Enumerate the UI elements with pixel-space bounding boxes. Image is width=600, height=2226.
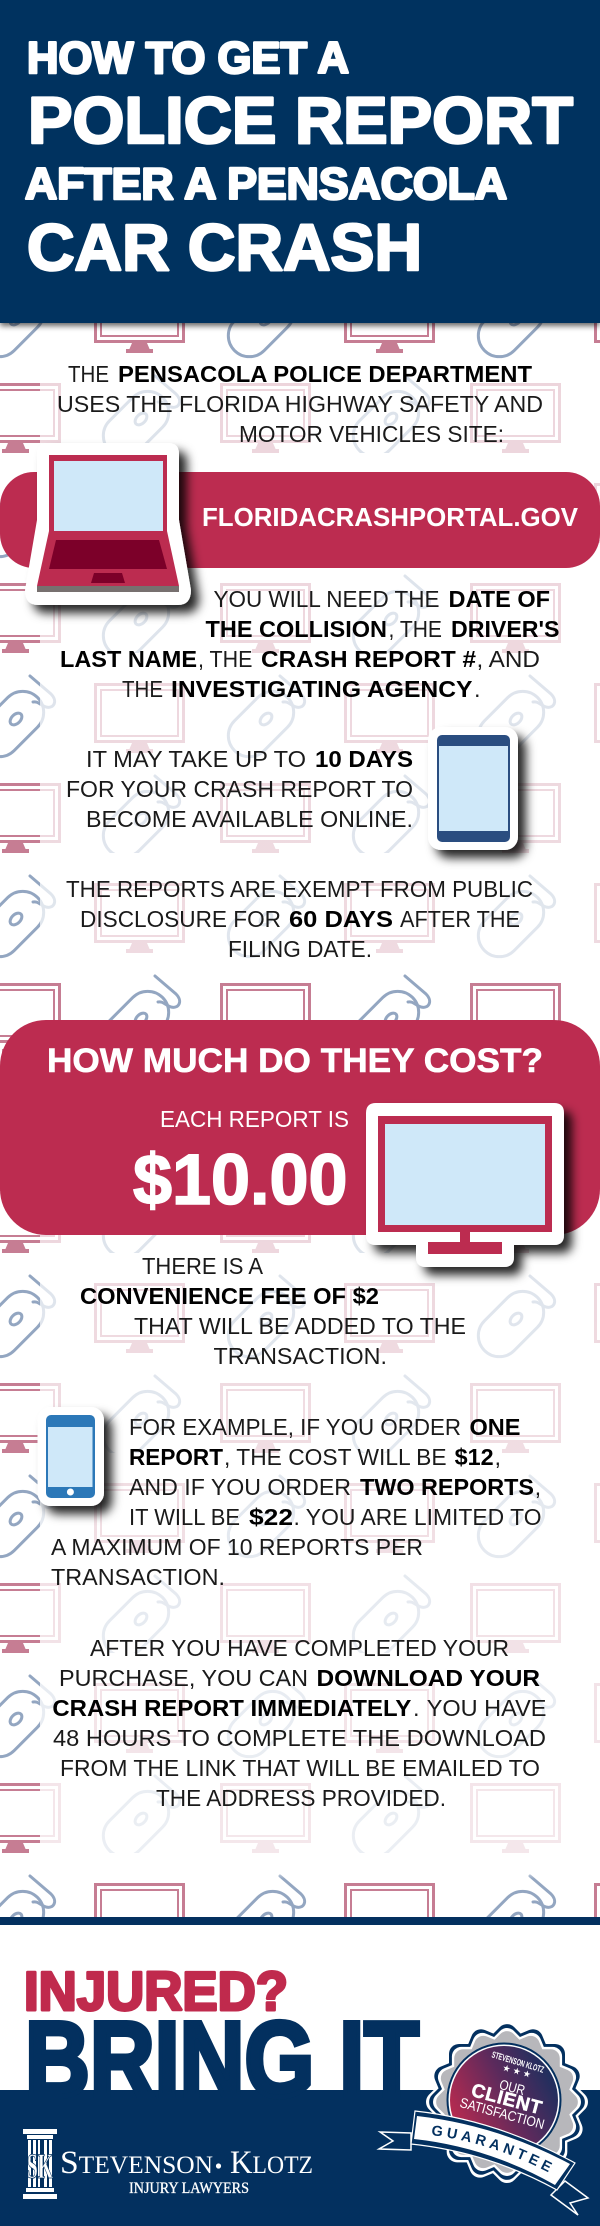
icon: laptop: [25, 443, 191, 605]
logo: injury lawyers: INJURY LAWYERS: [129, 2180, 249, 2197]
seal text: OUR: [498, 2076, 527, 2098]
text: convenience fee: CONVENIENCE FEE OF $2: [80, 1283, 379, 1309]
text: public disclosure exemption: FILING DATE.: [228, 936, 372, 962]
website address: FLORIDACRASHPORTAL.GOV: [202, 502, 579, 532]
text: ten days: [66, 746, 413, 832]
seal text: ★ ★ ★: [501, 2062, 532, 2080]
text: ten days: IT MAY TAKE UP TO: [86, 746, 306, 772]
text: what you will need: THE: [122, 676, 163, 702]
text: what you will need: , THE: [198, 646, 252, 672]
text: police department intro: PENSACOLA POLICE DEPARTMENT: [118, 361, 533, 387]
title: POLICE REPORT: [28, 83, 573, 157]
text: public disclosure exemption: [66, 876, 533, 962]
icon: monitor: [366, 1103, 564, 1267]
text: example costs: FOR EXAMPLE, IF YOU ORDER: [129, 1414, 461, 1440]
each report label: EACH REPORT IS: [160, 1106, 349, 1132]
text: what you will need: YOU WILL NEED THE: [214, 586, 440, 612]
text: convenience fee: THERE IS A: [142, 1253, 263, 1279]
ribbon text: GUARANTEE: [432, 2126, 552, 2172]
slogan: bring it: BRING IT: [25, 1999, 419, 2119]
text: ten days: FOR YOUR CRASH REPORT TO: [66, 776, 413, 802]
text: what you will need: , AND: [476, 646, 540, 672]
background pattern of monitors and mice: [0, 323, 600, 1917]
title: CAR CRASH: [27, 210, 422, 284]
text: example costs: . YOU ARE LIMITED TO: [294, 1504, 542, 1530]
text: convenience fee: THAT WILL BE ADDED TO THE: [134, 1313, 466, 1339]
text: public disclosure exemption: DISCLOSURE FOR: [80, 906, 281, 932]
text: public disclosure exemption: THE REPORTS ARE EXEMPT FROM PUBLIC: [66, 876, 533, 902]
price: $10.00: [133, 1141, 348, 1220]
text: download your report: .: [413, 1695, 420, 1721]
icon: tablet: [428, 727, 518, 850]
title: HOW TO GET A: [27, 34, 349, 83]
text: download your report: PURCHASE, YOU CAN: [59, 1665, 308, 1691]
text: convenience fee: [80, 1253, 466, 1369]
text: download your report: YOU HAVE: [427, 1695, 546, 1721]
text: police department intro: THE: [68, 361, 109, 387]
text: what you will need: DATE OF: [448, 586, 550, 612]
text: what you will need: , THE: [388, 616, 442, 642]
seal text: [458, 2049, 546, 2132]
text: example costs: TRANSACTION.: [51, 1564, 225, 1590]
badge: client satisfaction guarantee: [376, 2024, 590, 2216]
text: example costs: [51, 1414, 542, 1590]
text: police department intro: MOTOR VEHICLES SITE:: [239, 421, 504, 447]
text: example costs: $22: [249, 1504, 293, 1530]
text: what you will need: CRASH REPORT #: [261, 646, 476, 672]
text: example costs: IT WILL BE: [129, 1504, 240, 1530]
text: download your report: CRASH REPORT IMMEDIATELY: [52, 1695, 412, 1721]
logo: firm name: KLOTZ: [230, 2145, 313, 2181]
text: what you will need: [60, 586, 560, 702]
text: download your report: AFTER YOU HAVE COMPLETED YOUR: [90, 1635, 509, 1661]
text: example costs: ONE: [470, 1414, 520, 1440]
ribbon: [411, 2111, 575, 2190]
text: example costs: $12: [455, 1444, 494, 1470]
seal text: CLIENT: [469, 2080, 544, 2119]
text: public disclosure exemption: 60 DAYS: [289, 906, 393, 932]
text: what you will need: INVESTIGATING AGENCY: [171, 676, 473, 702]
seal text: STEVENSON KLOTZ: [491, 2049, 545, 2075]
logo: pillar: SK: [27, 2146, 53, 2186]
text: what you will need: THE COLLISION: [206, 616, 387, 642]
text: download your report: 48 HOURS TO COMPLETE THE DOWNLOAD: [53, 1725, 546, 1751]
panel: footer: [0, 1917, 600, 2226]
seal: [422, 2017, 592, 2187]
seal text: SATISFACTION: [458, 2094, 546, 2132]
header banner: [0, 0, 600, 323]
text: example costs: A MAXIMUM OF 10 REPORTS PER: [51, 1534, 423, 1560]
icon: phone: [38, 1407, 104, 1506]
text: download your report: THE ADDRESS PROVIDED.: [156, 1785, 446, 1811]
panel: cost: [0, 1020, 600, 1235]
text: example costs: ,: [535, 1474, 541, 1500]
text: example costs: AND IF YOU ORDER: [129, 1474, 351, 1500]
text: public disclosure exemption: AFTER THE: [400, 906, 520, 932]
text: what you will need: LAST NAME: [60, 646, 197, 672]
text: example costs: TWO REPORTS: [360, 1474, 534, 1500]
text: what you will need: .: [474, 676, 481, 702]
ribbon tails: [379, 2132, 588, 2215]
text: download your report: FROM THE LINK THAT WILL BE EMAILED TO: [60, 1755, 540, 1781]
title: [25, 34, 573, 284]
panel: website banner: [0, 472, 600, 568]
text: convenience fee: TRANSACTION.: [214, 1343, 387, 1369]
logo: firm name: STEVENSON: [60, 2145, 213, 2181]
title: AFTER A PENSACOLA: [25, 160, 507, 209]
text: example costs: REPORT: [129, 1444, 224, 1470]
text: what you will need: DRIVER'S: [451, 616, 560, 642]
text: police department intro: [57, 361, 543, 447]
text: example costs: ,: [494, 1444, 501, 1470]
logo: pillar: [23, 2129, 57, 2199]
text: police department intro: USES THE FLORIDA HIGHWAY SAFETY AND: [57, 391, 543, 417]
cost heading: HOW MUCH DO THEY COST?: [47, 1042, 543, 1080]
text: download your report: [52, 1635, 547, 1811]
text: ten days: BECOME AVAILABLE ONLINE.: [86, 806, 413, 832]
slogan: injured: INJURED?: [24, 1960, 288, 2022]
text: ten days: 10 DAYS: [315, 746, 413, 772]
text: example costs: , THE COST WILL BE: [224, 1444, 447, 1470]
text: download your report: DOWNLOAD YOUR: [316, 1665, 540, 1691]
logo: firm name: [60, 2145, 313, 2181]
